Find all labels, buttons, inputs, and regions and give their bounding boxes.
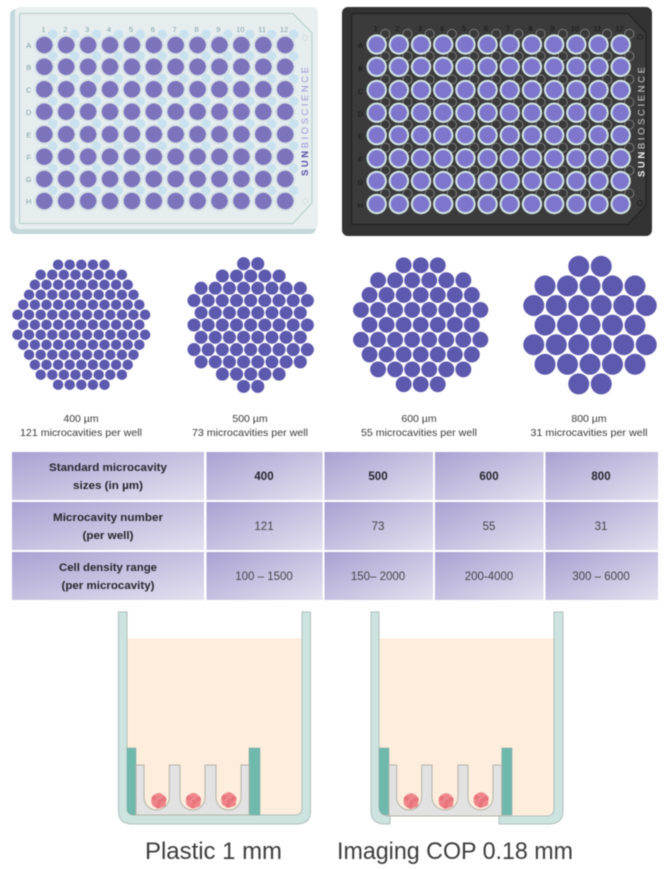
table row headers bbox=[49, 462, 168, 592]
column and row labels: 3 bbox=[418, 24, 422, 33]
caption: 800 µm bbox=[530, 413, 648, 439]
table size values: 500 bbox=[368, 471, 388, 483]
column and row labels: 3 bbox=[85, 25, 89, 34]
caption: 500 µm: 500 µm bbox=[232, 413, 268, 425]
chart: 800 µm microcavity layout bbox=[534, 266, 646, 384]
column and row labels: A bbox=[26, 41, 31, 50]
table number and density values: 200-4000 bbox=[465, 571, 513, 583]
well wall bbox=[371, 612, 563, 824]
column and row labels: F bbox=[26, 153, 31, 162]
table row headers: Microcavity number bbox=[53, 512, 164, 524]
table number and density values: 100 – 1500 bbox=[235, 571, 293, 583]
cavity captions bbox=[20, 413, 648, 439]
column and row labels: 4 bbox=[440, 24, 444, 33]
column and row labels: D bbox=[26, 108, 32, 117]
column and row labels: 6 bbox=[484, 24, 488, 33]
column and row labels: 11 bbox=[594, 24, 601, 33]
column and row labels: 2 bbox=[63, 25, 67, 34]
column and row labels: 6 bbox=[151, 25, 155, 34]
insert supports bbox=[379, 748, 512, 815]
table number and density values: 31 bbox=[595, 521, 607, 533]
table number and density values: 150– 2000 bbox=[351, 571, 405, 583]
caption: 400 µm bbox=[20, 413, 142, 439]
column and row labels: E bbox=[26, 130, 31, 140]
table row headers: (per well) bbox=[82, 530, 134, 542]
column and row labels: C bbox=[358, 87, 364, 96]
column and row labels: 2 bbox=[395, 24, 400, 33]
table size values: 400 bbox=[254, 471, 274, 483]
column and row labels bbox=[358, 24, 624, 210]
table number and density values: 300 – 6000 bbox=[572, 571, 630, 583]
column and row labels: E bbox=[358, 132, 363, 141]
caption: 800 µm: 31 microcavities per well bbox=[530, 427, 648, 439]
caption: 400 µm: 400 µm bbox=[63, 413, 99, 425]
table: microcavity specifications bbox=[12, 452, 658, 600]
caption: 600 µm bbox=[361, 413, 477, 439]
culture medium bbox=[127, 638, 302, 815]
table number and density values: 55 bbox=[483, 521, 495, 533]
column and row labels: 10 bbox=[236, 25, 244, 34]
column and row labels: 4 bbox=[107, 25, 111, 34]
column and row labels: G bbox=[358, 178, 364, 187]
column and row labels: 5 bbox=[462, 24, 466, 33]
caption: 500 µm: 73 microcavities per well bbox=[192, 427, 308, 439]
plate body bbox=[10, 7, 318, 234]
insert supports bbox=[127, 748, 260, 815]
chart: 600 µm microcavity layout bbox=[361, 265, 480, 384]
plate body bbox=[342, 7, 652, 236]
table row headers: sizes (in µm) bbox=[73, 480, 143, 492]
column and row labels: C bbox=[26, 86, 32, 94]
column and row labels: 8 bbox=[528, 24, 533, 33]
column and row labels: 12 bbox=[280, 25, 288, 34]
column and row labels: 1 bbox=[374, 24, 378, 33]
brand label: SUNBIOSCIENCE bbox=[636, 67, 648, 177]
column and row labels: H bbox=[358, 201, 363, 210]
label: Plastic 1 mm: Plastic 1 mm bbox=[145, 838, 282, 865]
brand label: SUNBIOSCIENCE bbox=[300, 67, 311, 176]
cell spheroids bbox=[151, 792, 236, 809]
caption: 600 µm: 600 µm bbox=[401, 413, 437, 425]
column and row labels: 9 bbox=[216, 25, 220, 34]
column and row labels: 9 bbox=[550, 24, 555, 33]
table row headers: Cell density range bbox=[59, 562, 157, 574]
column and row labels: 8 bbox=[194, 25, 199, 34]
chart: 400 µm microcavity layout bbox=[18, 265, 145, 385]
column and row labels: 1 bbox=[41, 25, 46, 34]
diagram: plastic 1 mm well cross-section bbox=[118, 612, 310, 824]
caption: 600 µm: 55 microcavities per well bbox=[361, 427, 477, 439]
wells grid bbox=[34, 30, 298, 211]
table number and density values: 73 bbox=[372, 521, 384, 533]
table size values: 800 bbox=[591, 471, 611, 483]
column and row labels: 5 bbox=[129, 25, 133, 34]
caption: 800 µm: 800 µm bbox=[571, 413, 607, 425]
well wall bbox=[118, 612, 310, 824]
column and row labels: 7 bbox=[173, 25, 177, 34]
column and row labels: 11 bbox=[258, 25, 266, 34]
cell spheroids bbox=[403, 792, 489, 809]
caption: 400 µm: 121 microcavities per well bbox=[20, 427, 142, 439]
column and row labels: A bbox=[358, 41, 363, 50]
column and row labels: G bbox=[26, 175, 32, 184]
column and row labels: H bbox=[26, 197, 31, 206]
column and row labels bbox=[26, 25, 288, 206]
table size values: 600 bbox=[479, 471, 499, 483]
column and row labels: F bbox=[358, 155, 363, 164]
label: Imaging COP 0.18 mm: Imaging COP 0.18 mm bbox=[337, 838, 573, 865]
column and row labels: 12 bbox=[615, 24, 624, 33]
caption: 500 µm bbox=[192, 413, 308, 439]
diagram: imaging COP 0.18 mm well cross-section bbox=[371, 612, 563, 824]
table number and density values bbox=[235, 521, 630, 583]
column and row labels: B bbox=[358, 64, 363, 73]
table row headers: Standard microcavity bbox=[49, 462, 168, 474]
table cells bbox=[12, 452, 658, 600]
column and row labels: 7 bbox=[506, 24, 510, 33]
column and row labels: 10 bbox=[571, 24, 579, 33]
column and row labels: D bbox=[358, 110, 364, 118]
column and row labels: B bbox=[26, 63, 31, 72]
table row headers: (per microcavity) bbox=[62, 580, 155, 592]
table number and density values: 121 bbox=[254, 521, 274, 533]
microcavity insert bbox=[136, 765, 249, 815]
chart: 500 µm microcavity layout bbox=[194, 264, 308, 386]
table size values bbox=[254, 471, 611, 483]
microcavity insert bbox=[389, 765, 502, 816]
panel: black 96-well plate bbox=[342, 7, 652, 236]
wells grid bbox=[366, 29, 634, 214]
culture medium bbox=[379, 638, 554, 816]
panel: clear 96-well plate bbox=[10, 7, 318, 234]
